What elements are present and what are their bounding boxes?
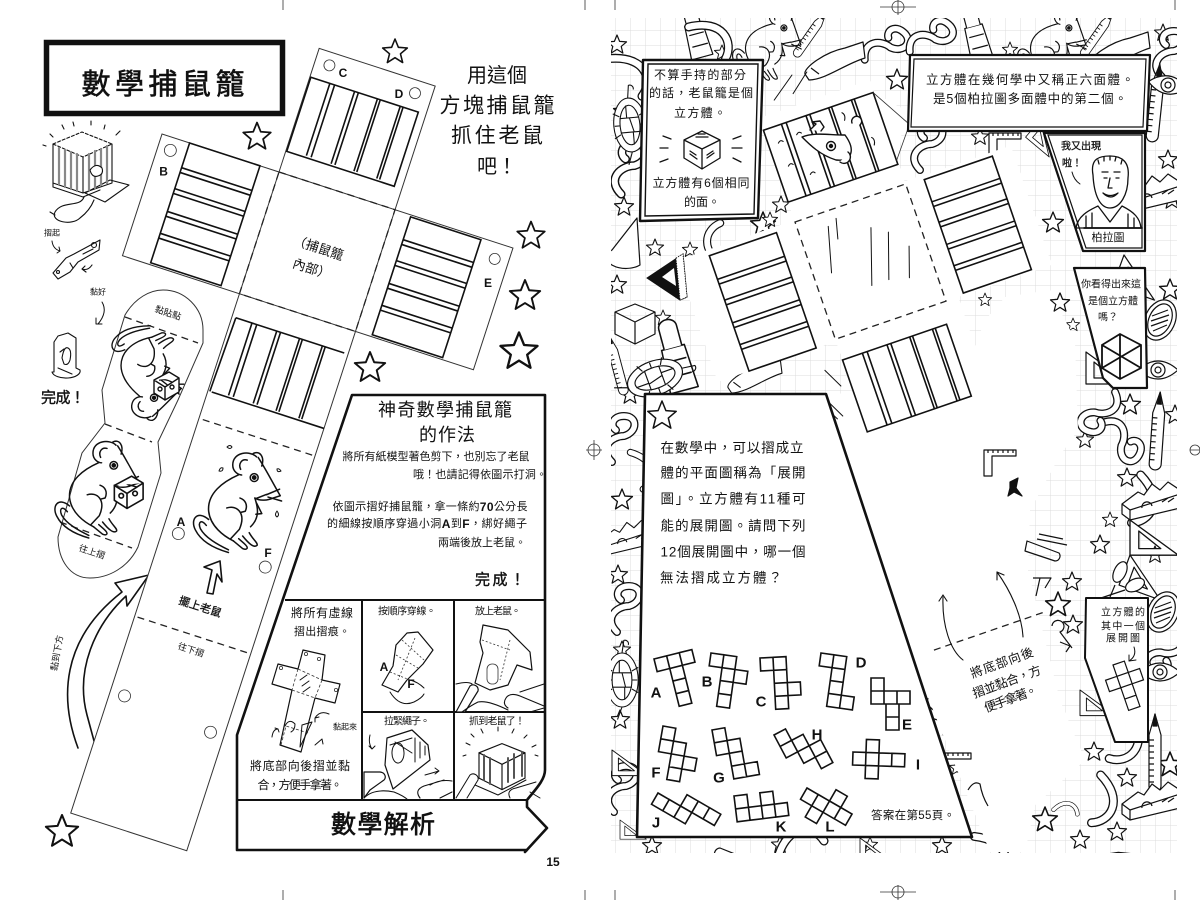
text: C: [339, 66, 348, 80]
arrows and note on strip: 摺並黏合，方: [970, 662, 1043, 701]
arrows and note on strip: 將底部向後: [968, 644, 1035, 681]
question text: 在數學中，可以摺成立: [660, 440, 804, 456]
white cut-out of paper net: [641, 43, 1093, 852]
labels A F: F: [264, 546, 272, 560]
star: [648, 401, 676, 428]
up arrow: put on mouse: 擺上老鼠: [177, 593, 223, 620]
net H: [774, 717, 833, 781]
right net: dashed folds and hatch: [712, 52, 1052, 661]
panel: mouse cage is a cube: [640, 60, 763, 221]
arrows and note on strip: 便手拿著。: [982, 682, 1040, 715]
net I: I: [916, 756, 920, 774]
net F: F: [651, 764, 661, 782]
net J: [652, 782, 721, 837]
panel: mouse cage is a cube: 立方體。: [674, 105, 726, 120]
crop marks: [283, 0, 1200, 900]
net B: B: [702, 674, 713, 690]
up arrow: put on mouse: [177, 561, 223, 620]
text: E: [484, 276, 492, 290]
step 1: 黏起來: [333, 722, 357, 732]
arrows and note on strip: [939, 572, 1043, 715]
panel: how to make: [237, 395, 547, 852]
panel: Plato portrait: [1044, 133, 1145, 251]
step 5: [456, 714, 540, 798]
net E: E: [902, 716, 912, 734]
decorative stars, left page: [46, 39, 545, 846]
icon: cube: [660, 131, 742, 169]
text: D: [395, 87, 404, 101]
labels A F: [177, 515, 272, 560]
net C: C: [756, 694, 767, 710]
mouse upside down on card: [95, 317, 197, 426]
note: fold up: 摺起: [44, 228, 60, 238]
panel: one net of the cube: 立方體的: [1101, 606, 1145, 618]
question text: 無法摺成立方體？: [660, 570, 782, 586]
net A: A: [651, 684, 662, 702]
panel: mouse cage is a cube: 立方體有6個相同: [652, 175, 750, 190]
note: glued: 黏好: [90, 286, 106, 296]
step 3: 放上老鼠。: [475, 604, 521, 618]
icon: finished mouse cage: [43, 121, 129, 222]
net D: D: [856, 654, 867, 672]
net D: [814, 653, 867, 710]
paper net: dashed folds: [135, 172, 395, 654]
panel: how to make: 依圖示摺好捕鼠籠，拿一條約70公分長: [332, 499, 528, 514]
net G: G: [713, 770, 725, 786]
step 4: [364, 714, 452, 800]
icon: folded tab: [53, 240, 100, 279]
intro text: [440, 64, 554, 178]
page number: 15: [546, 855, 560, 869]
doodles inside cut-out: [939, 293, 1080, 831]
left page title box: 數學捕鼠籠: [82, 68, 244, 101]
step 1: [250, 605, 357, 792]
panel: hexahedron note: [908, 55, 1150, 131]
panel: hexagon question: 你看得出來這: [1081, 278, 1141, 290]
intro text: 用這個: [467, 64, 527, 87]
banner: math analysis: 數學解析: [331, 811, 435, 839]
step 1: 將所有虛線: [291, 605, 353, 620]
step 1: 將底部向後摺並黏: [250, 758, 350, 773]
paper net: dashed folds: （捕鼠籠: [291, 233, 346, 263]
body: 將所有紙模型著色剪下，也別忘了老鼠: [342, 449, 530, 463]
paper mouse card: 往上摺: [78, 542, 107, 561]
net H: H: [812, 726, 822, 744]
net K: K: [776, 818, 787, 836]
step 2: F: [407, 677, 415, 691]
net I: [852, 739, 920, 780]
step 1: 摺出摺痕。: [294, 624, 350, 638]
icon: hexagon: [1102, 334, 1141, 379]
panel: hexahedron note: 是5個柏拉圖多面體中的第二個。: [933, 91, 1127, 106]
paper net: left panel B: [122, 134, 279, 294]
panel: hexagon question: [1074, 268, 1147, 388]
frightened mouse: [194, 446, 282, 552]
panel: how to make: 完成！: [475, 572, 525, 588]
net K: [734, 790, 789, 836]
paper mouse card: [55, 290, 203, 578]
left page title box: [46, 42, 282, 114]
panel: how to make: 哦！也請記得依圖示打洞。: [413, 467, 547, 481]
panel: Plato portrait: 我又出現: [1061, 140, 1101, 152]
doodle background: [600, 0, 1189, 890]
panel: mouse cage is a cube: 的面。: [684, 194, 720, 209]
net F: [651, 726, 701, 784]
panel: hexagon question: 是個立方體: [1088, 294, 1138, 308]
question text: 12個展開圖中，哪一個: [660, 544, 806, 560]
doodle: scissors: [1102, 561, 1145, 597]
mouse with cheese on card: [55, 441, 140, 538]
question text: [660, 440, 806, 586]
paper net: long strip: [71, 294, 355, 851]
right net: right bars: [924, 156, 1031, 293]
panel: hexagon question: 嗎？: [1098, 312, 1118, 324]
net G: [712, 723, 759, 786]
right net: cage panel with mouse: [763, 85, 921, 202]
step 2: 按順序穿線。: [378, 604, 436, 618]
paper net: top panel C D: [279, 48, 435, 210]
net B: [702, 653, 750, 710]
doodle: cone: [607, 218, 640, 268]
step 2: [378, 604, 436, 704]
net L: L: [825, 818, 835, 836]
answer note: 答案在第55頁。: [871, 808, 955, 822]
icon: cross net: [1102, 657, 1151, 714]
text: fold down: 往下摺: [177, 640, 206, 659]
right net: left bars: [709, 233, 816, 371]
net E: [871, 678, 912, 734]
paper mouse card: 黏貼點: [154, 303, 183, 322]
step 4: 拉緊繩子。: [384, 714, 430, 728]
panel: one net of the cube: 展開圖: [1106, 632, 1140, 644]
net A: [651, 650, 704, 709]
text: finished: 完成！: [41, 390, 85, 406]
text: stick below: 黏到下方: [48, 634, 65, 672]
question text: 體的平面圖稱為「展開: [660, 466, 806, 480]
panel: mouse cage is a cube: 的話，老鼠籠是個: [649, 85, 753, 100]
question text: 能的展開圖。請問下列: [660, 518, 806, 534]
doodle: impossible triangle: [647, 254, 687, 300]
net C: [756, 656, 802, 710]
panel: one net of the cube: [1085, 598, 1151, 742]
icon: finished stand: [52, 333, 80, 378]
net L: [794, 777, 859, 837]
panel: Plato portrait: 柏拉圖: [1092, 230, 1124, 244]
step 3: [456, 604, 544, 712]
step 5: 抓到老鼠了！: [469, 714, 525, 728]
intro text: 方塊捕鼠籠: [440, 94, 554, 118]
intro text: 抓住老鼠: [451, 124, 543, 148]
step 2: A: [380, 660, 389, 674]
panel: how to make: 的細線按順序穿過小洞A到F，綁好繩子: [327, 516, 527, 531]
paper net: left panel B: B: [159, 164, 168, 178]
panel: one net of the cube: 其中一個: [1101, 620, 1145, 632]
panel: mouse cage is a cube: 不算手持的部分: [654, 67, 746, 82]
note: glued: [90, 286, 106, 324]
intro text: 吧！: [477, 156, 517, 178]
right page graph paper: [611, 18, 1177, 853]
right net: bottom bars: [843, 324, 971, 432]
panel: hexahedron note: 立方體在幾何學中又稱正六面體。: [926, 72, 1134, 87]
paper net: right panel E: [355, 210, 513, 370]
question text: 圖」。立方體有11種可: [660, 492, 806, 506]
step 1: 合，方便手拿著。: [258, 777, 342, 792]
net J: J: [652, 814, 660, 832]
labels A F: A: [177, 515, 186, 529]
panel: how to make: 的作法: [419, 425, 475, 445]
Plato face: [1076, 156, 1142, 228]
note: fold up: [44, 228, 60, 253]
heading: 神奇數學捕鼠籠: [378, 400, 512, 420]
panel: how to make: 兩端後放上老鼠。: [438, 535, 526, 549]
paper net: dashed folds: 內部）: [291, 256, 333, 282]
panel: question: [637, 394, 972, 837]
panel: Plato portrait: 啦！: [1062, 156, 1082, 170]
mouse reaching out of cage: [802, 116, 862, 163]
big curved arrow: [68, 575, 149, 752]
